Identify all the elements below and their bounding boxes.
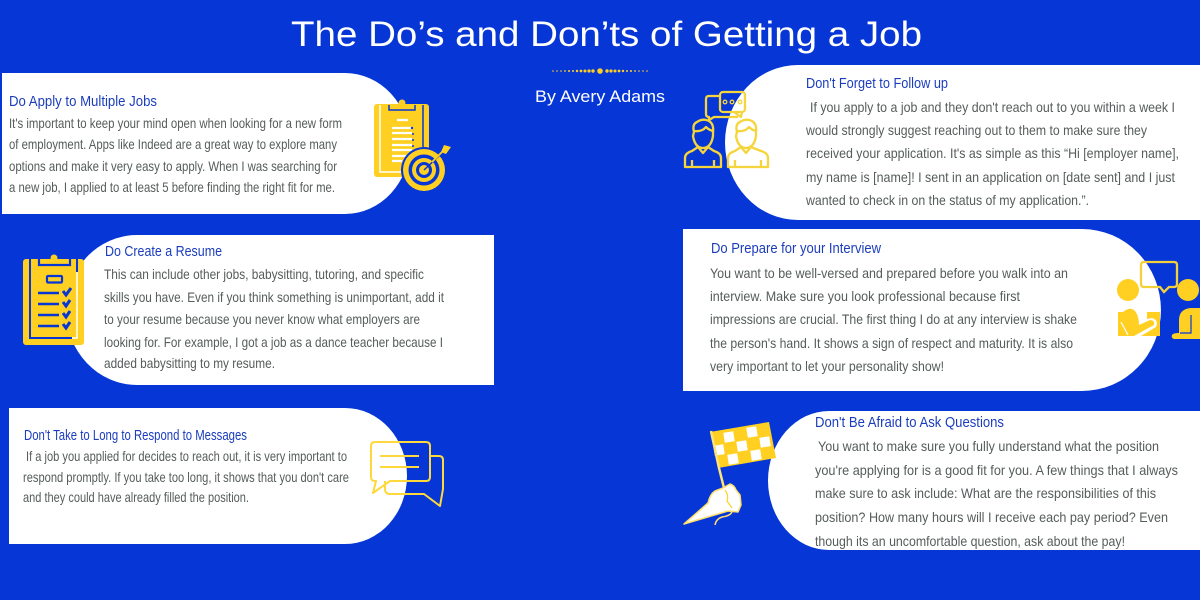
body text: skills you have. Even if you think something is unimportant, add it: [104, 289, 444, 305]
icon: interview conversation: [1117, 262, 1200, 339]
heading: Don't Forget to Follow up: [806, 75, 948, 92]
body text: This can include other jobs, babysitting, tutoring, and specific: [104, 266, 424, 282]
author byline: By Avery Adams: [535, 88, 665, 106]
icon: checklist clipboard: [23, 254, 84, 345]
body text: respond promptly. If you take too long, it shows that you don't care: [23, 469, 349, 485]
heading: Do Apply to Multiple Jobs: [9, 93, 157, 110]
body text: [23, 448, 349, 505]
body text: very important to let your personality show!: [710, 358, 944, 374]
panel shape: [683, 229, 1161, 391]
panel: don't be afraid to ask questions: [684, 411, 1200, 550]
body text: [104, 266, 444, 371]
panel: don't forget to follow up: [685, 65, 1200, 220]
heading: Don't Be Afraid to Ask Questions: [815, 414, 1004, 431]
body text: impressions are crucial. The first thing I do at any interview is shake: [710, 311, 1077, 327]
body text: It's important to keep your mind open when looking for a new form: [9, 115, 342, 131]
body text: would strongly suggest reaching out to them to make sure they: [805, 122, 1147, 138]
body text: and they could have already filled the position.: [23, 489, 249, 505]
body text: options and make it very easy to apply. When I was searching for: [9, 158, 337, 174]
panel: do prepare for your interview: [683, 229, 1200, 391]
body text: [815, 438, 1178, 549]
panel shape: [9, 408, 407, 544]
body text: You want to be well-versed and prepared before you walk into an: [710, 265, 1068, 281]
body text: wanted to check in on the status of my application.”.: [805, 192, 1089, 208]
panel: don't take too long: [9, 408, 443, 544]
body text: of employment. Apps like Indeed are a great way to explore many: [9, 136, 337, 152]
body text: the person's hand. It shows a sign of respect and maturity. It is also: [710, 335, 1073, 351]
body text: You want to make sure you fully understand what the position: [818, 438, 1159, 454]
panel shape: [768, 411, 1200, 550]
body text: [805, 99, 1179, 208]
body text: looking for. For example, I got a job as a dance teacher because I: [104, 334, 443, 350]
icon: clipboard with target: [374, 100, 451, 193]
panel: do apply to multiple jobs: [2, 73, 451, 214]
body text: though its an uncomfortable question, ask about the pay!: [815, 533, 1125, 549]
body text: If a job you applied for decides to reach out, it is very important to: [26, 448, 347, 464]
panel shape: [66, 235, 494, 385]
panel shape: [2, 73, 410, 214]
icon: checkered flag in hand: [684, 422, 776, 525]
body text: make sure to ask include: What are the responsibilities of this: [815, 485, 1156, 501]
heading: Do Create a Resume: [105, 243, 222, 260]
body text: to your resume because you never know what employers are: [104, 311, 420, 327]
title: The Do’s and Don’ts of Getting a Job: [291, 15, 922, 54]
heading: Don't Take to Long to Respond to Messages: [24, 427, 247, 444]
panel shape: [725, 65, 1200, 220]
panel: do create a resume: [23, 235, 494, 385]
heading: Do Prepare for your Interview: [711, 240, 881, 257]
body text: interview. Make sure you look professional because first: [710, 288, 1020, 304]
icon: chat bubbles: [371, 442, 443, 506]
dotted divider: [552, 68, 648, 74]
body text: [9, 115, 342, 195]
icon: two people talking: [685, 92, 768, 167]
body text: added babysitting to my resume.: [104, 355, 275, 371]
body text: a new job, I applied to at least 5 before finding the right fit for me.: [9, 179, 335, 195]
body text: position? How many hours will I receive each pay period? Even: [815, 509, 1168, 525]
body text: [710, 265, 1077, 374]
